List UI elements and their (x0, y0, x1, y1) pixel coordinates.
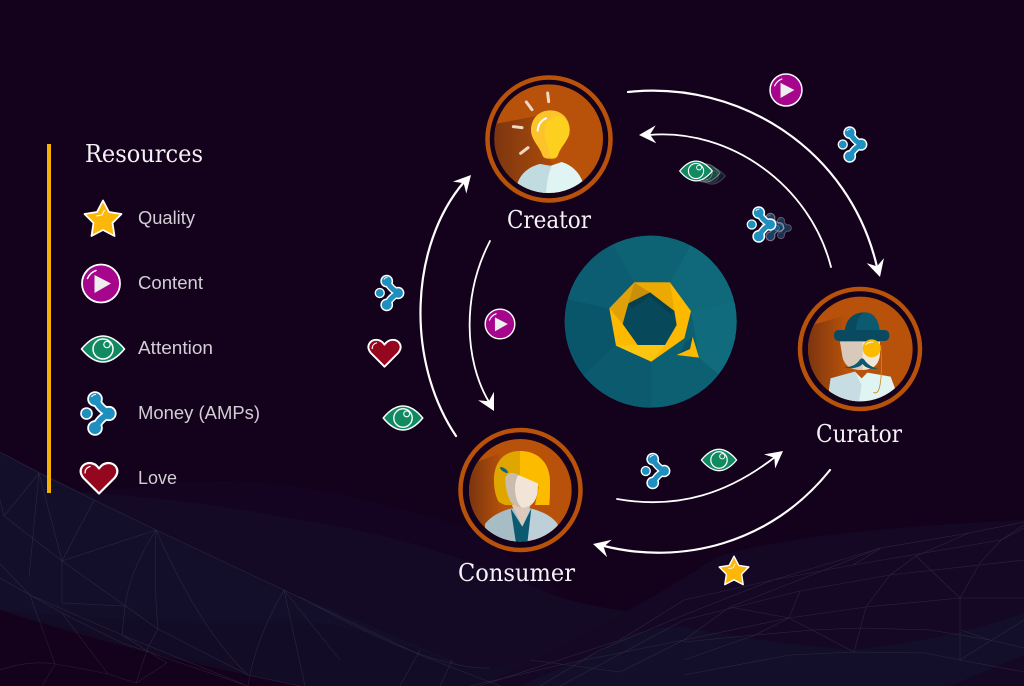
body (485, 508, 558, 545)
monocle (863, 339, 881, 357)
arrow: consumer to curator (617, 444, 789, 502)
label: Consumer: Consumer (458, 559, 575, 587)
node: Creator (488, 78, 610, 234)
legend item: Love (81, 463, 177, 494)
flow icon: content to consumer (485, 309, 515, 339)
network mesh: left (0, 452, 500, 686)
body (518, 162, 582, 193)
legend item: Content (82, 264, 203, 302)
legend item: Love: Love (138, 468, 177, 488)
hat (844, 312, 880, 330)
flow icon: quality (719, 556, 749, 585)
arrow: curator to creator (639, 125, 831, 267)
neck (512, 505, 531, 526)
face (840, 342, 880, 370)
legend item: Quality: Quality (138, 208, 195, 228)
flow icon: love (368, 340, 401, 367)
flow icon: attention left (383, 406, 423, 430)
legend item: Money (AMPs) (80, 391, 260, 436)
face (505, 473, 538, 508)
moustache (843, 358, 879, 369)
flow icon: content to curator (770, 74, 802, 106)
rays (513, 93, 549, 153)
flow icon: attention to creator (680, 161, 725, 184)
legend bar (47, 144, 51, 493)
arrow: creator to curator (628, 91, 889, 279)
arrow: creator to consumer (470, 241, 502, 415)
node: Curator (800, 289, 920, 448)
node: Consumer (458, 430, 580, 587)
flow icon: attention bottom (701, 449, 737, 471)
legend heading: Resources (85, 140, 203, 168)
label: Curator: Curator (816, 420, 902, 448)
body (829, 372, 895, 403)
arrow: consumer to creator (420, 169, 478, 436)
flow icon: money to creator (747, 206, 792, 243)
light bulb (531, 110, 570, 159)
legend: Resources (47, 140, 260, 494)
legend item: Content: Content (138, 273, 203, 293)
legend item: Quality (84, 200, 195, 236)
central logo (564, 236, 737, 408)
flow icon: money to curator (838, 126, 867, 163)
logo triangle (677, 337, 699, 358)
flow icon: money to creator left (375, 275, 404, 311)
arrows (420, 91, 889, 557)
legend item: Attention (82, 336, 213, 362)
flow icon: money to curator bottom (641, 453, 670, 489)
arrow: curator to consumer (591, 470, 830, 557)
hair (494, 451, 520, 505)
logo ring (609, 282, 691, 362)
legend item: Money (AMPs): Money (AMPs) (138, 403, 260, 423)
network mesh: right (470, 522, 1024, 686)
label: Creator: Creator (507, 206, 591, 234)
legend item: Attention: Attention (138, 338, 213, 358)
hair clip (500, 467, 508, 473)
